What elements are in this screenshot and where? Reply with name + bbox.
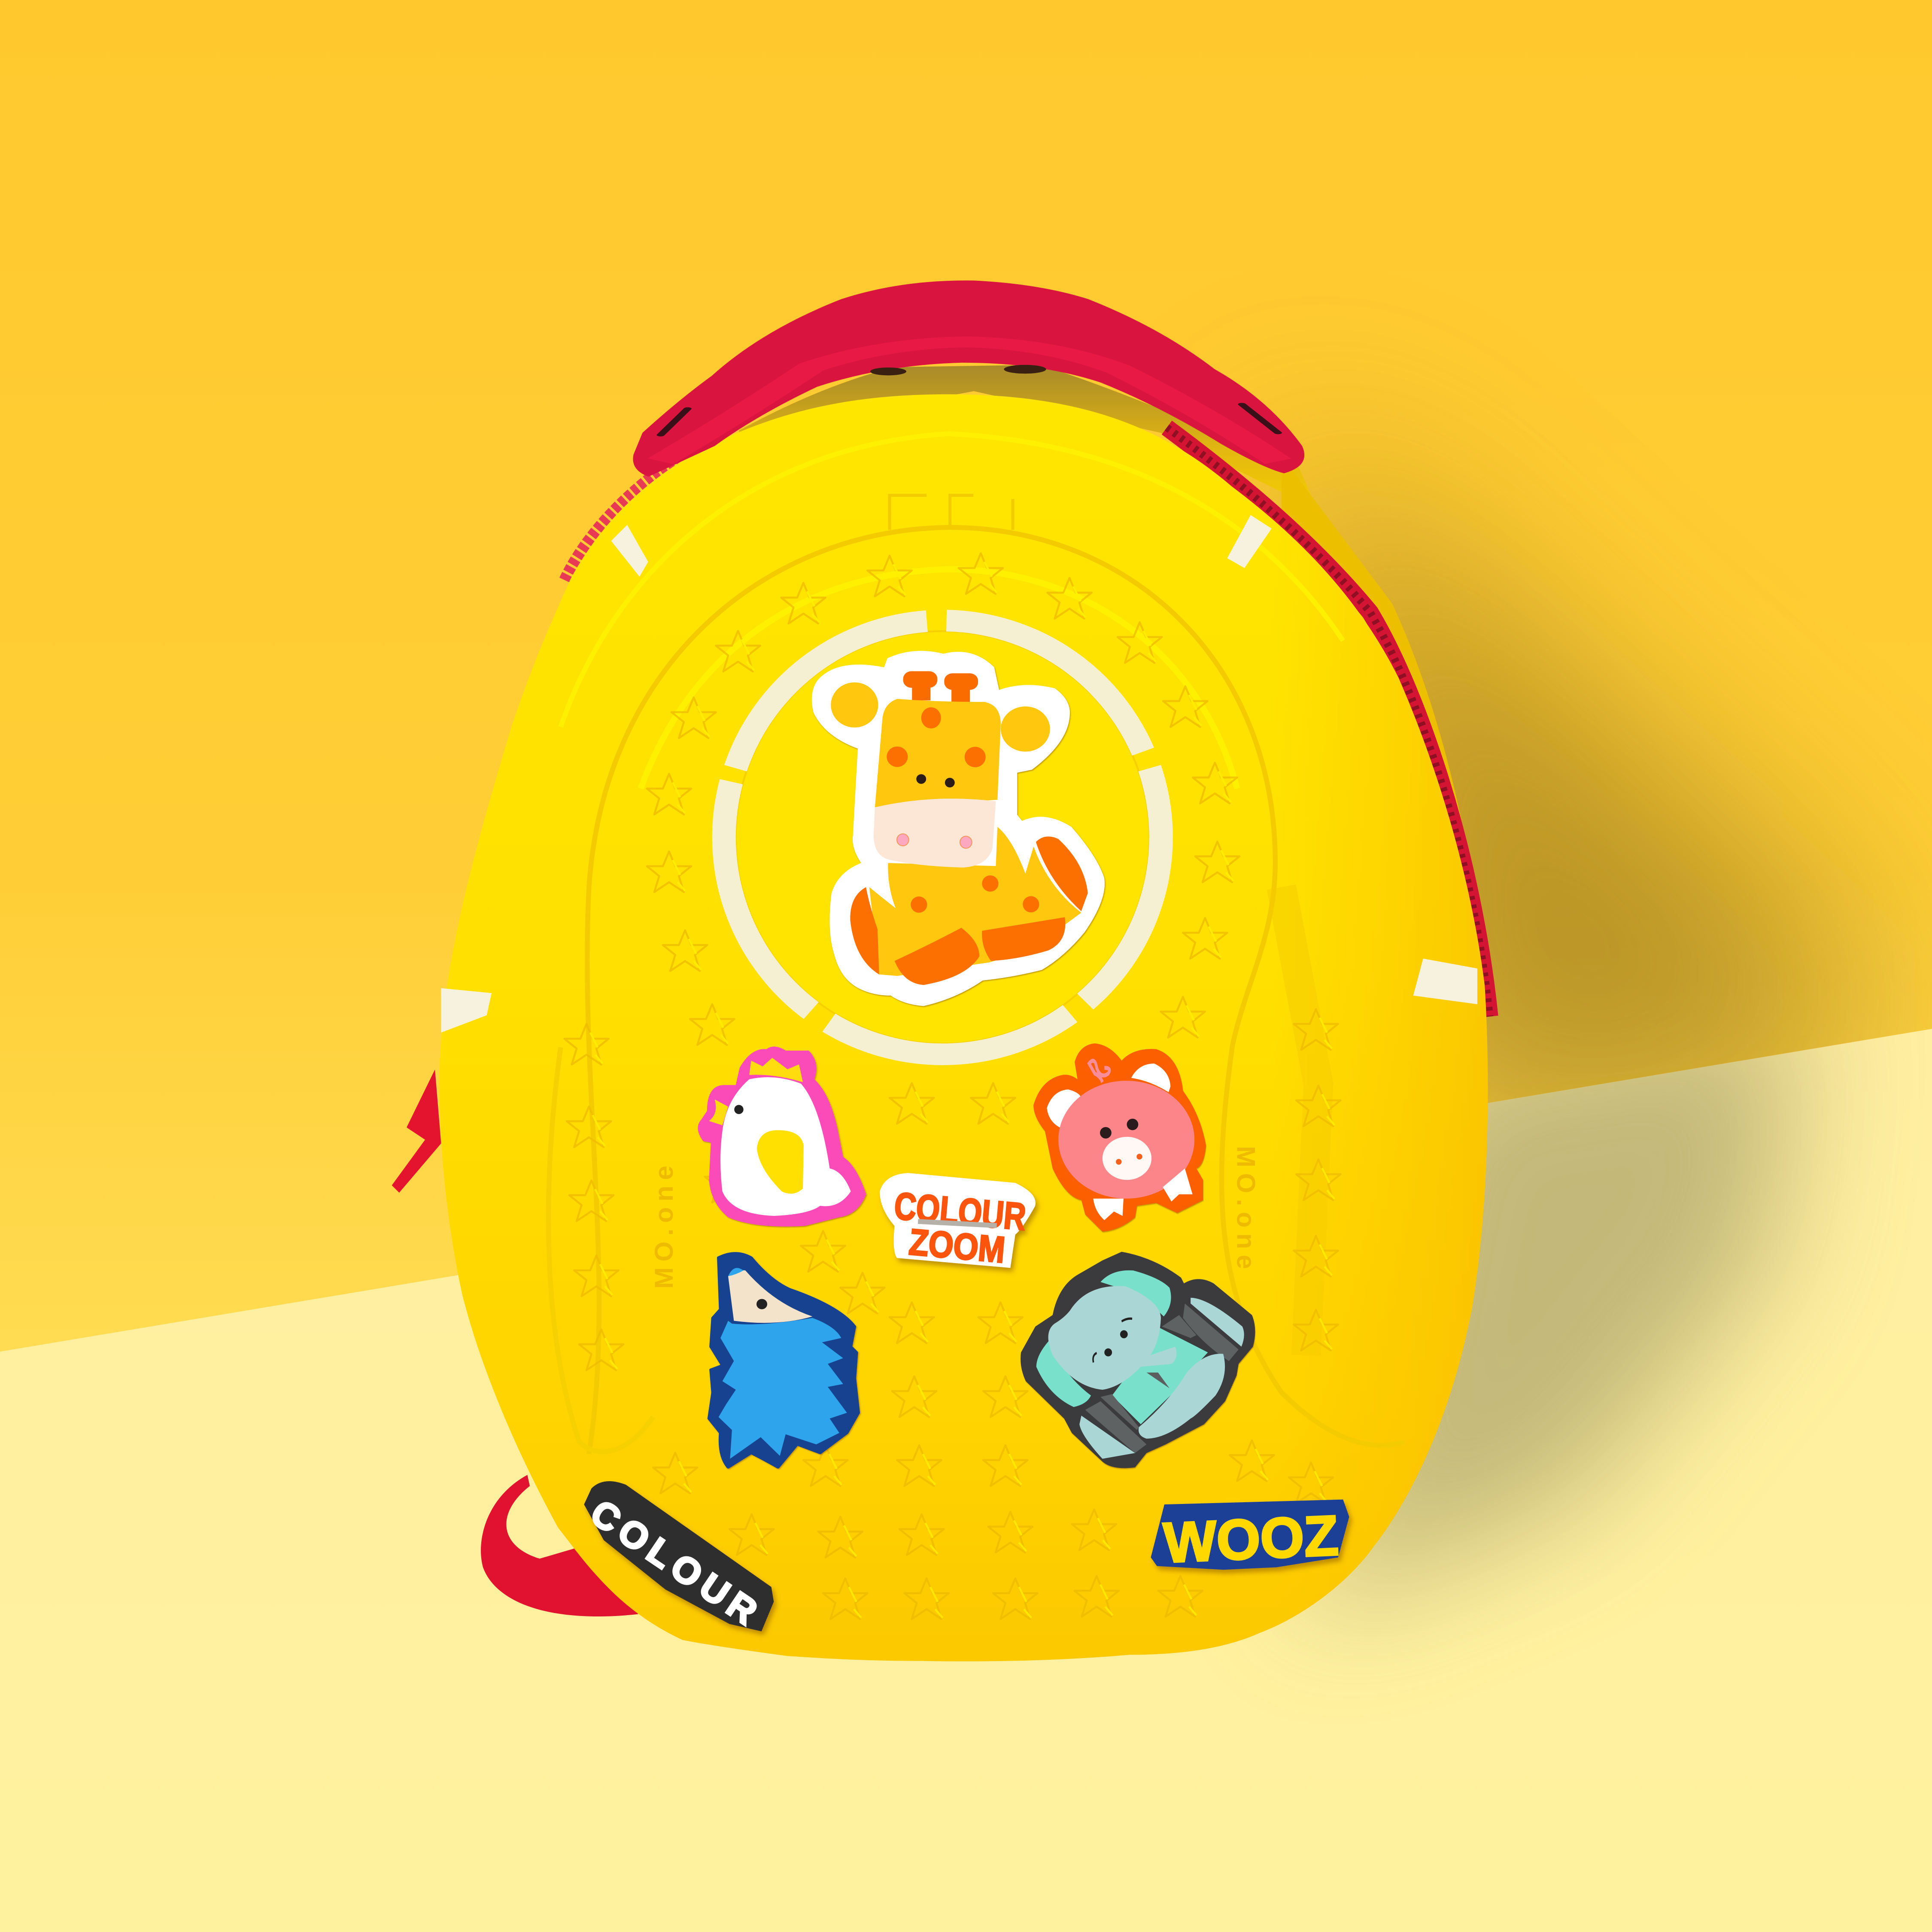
sticker text zoom: ZOOM xyxy=(907,1221,1007,1271)
sticker: pig xyxy=(1033,1043,1206,1232)
embossed star pattern xyxy=(564,553,1340,1619)
background floor xyxy=(0,998,1932,1932)
white tabs xyxy=(441,515,1477,1033)
left zipper pull xyxy=(392,1069,441,1193)
sticker: chicken xyxy=(698,1047,866,1227)
red strap loop xyxy=(481,1475,638,1616)
sticker: COLOUR xyxy=(583,1481,774,1633)
carry handle xyxy=(633,280,1304,477)
rear shell and zipper xyxy=(564,365,1491,1017)
COLOUR sticker text: COLOUR xyxy=(583,1492,765,1633)
sticker base xyxy=(880,1173,1036,1268)
sticker: WOOZ xyxy=(1151,1500,1349,1574)
COLOUR sticker base xyxy=(584,1481,774,1631)
backpack shell xyxy=(440,394,1488,1662)
WOOZ sticker text: WOOZ xyxy=(1162,1503,1340,1574)
WOOZ sticker base xyxy=(1151,1500,1349,1570)
sticker: giraffe xyxy=(812,651,1105,1006)
embossed brand text right: MO.one xyxy=(1231,1146,1261,1269)
sticker: hedgehog xyxy=(709,1253,859,1467)
sticker: colour zoom xyxy=(880,1173,1036,1271)
embossed horseshoe panel xyxy=(549,434,1405,1454)
sticker divider xyxy=(918,1219,997,1228)
background wall xyxy=(0,0,1932,1352)
sticker: elephant xyxy=(1021,1252,1255,1468)
sticker text colour: COLOUR xyxy=(893,1184,1028,1238)
embossed brand text left: MO.one xyxy=(649,1166,678,1289)
badge ring xyxy=(724,621,1161,1054)
